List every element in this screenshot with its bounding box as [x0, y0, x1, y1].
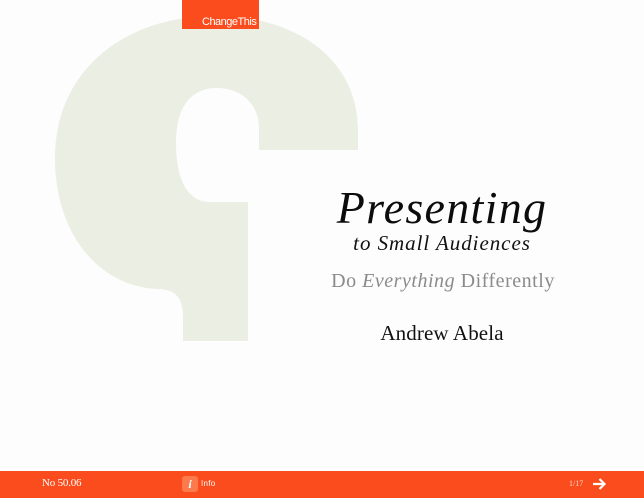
- author: Andrew Abela: [380, 321, 504, 345]
- page number: 1/17: [569, 479, 583, 488]
- footer bar: [0, 471, 644, 498]
- logo text: ChangeThis: [202, 16, 256, 28]
- icon: next arrow: [593, 478, 606, 490]
- tagline: Do Everything Differently: [331, 270, 555, 292]
- subtitle: to Small Audiences: [353, 231, 531, 255]
- icon: info: [182, 476, 198, 492]
- issue number: No 50.06: [42, 477, 81, 489]
- title: Presenting: [337, 182, 547, 233]
- logo tab: ChangeThis: [182, 0, 259, 29]
- icon: info: i: [188, 477, 192, 491]
- info label: Info: [201, 479, 216, 488]
